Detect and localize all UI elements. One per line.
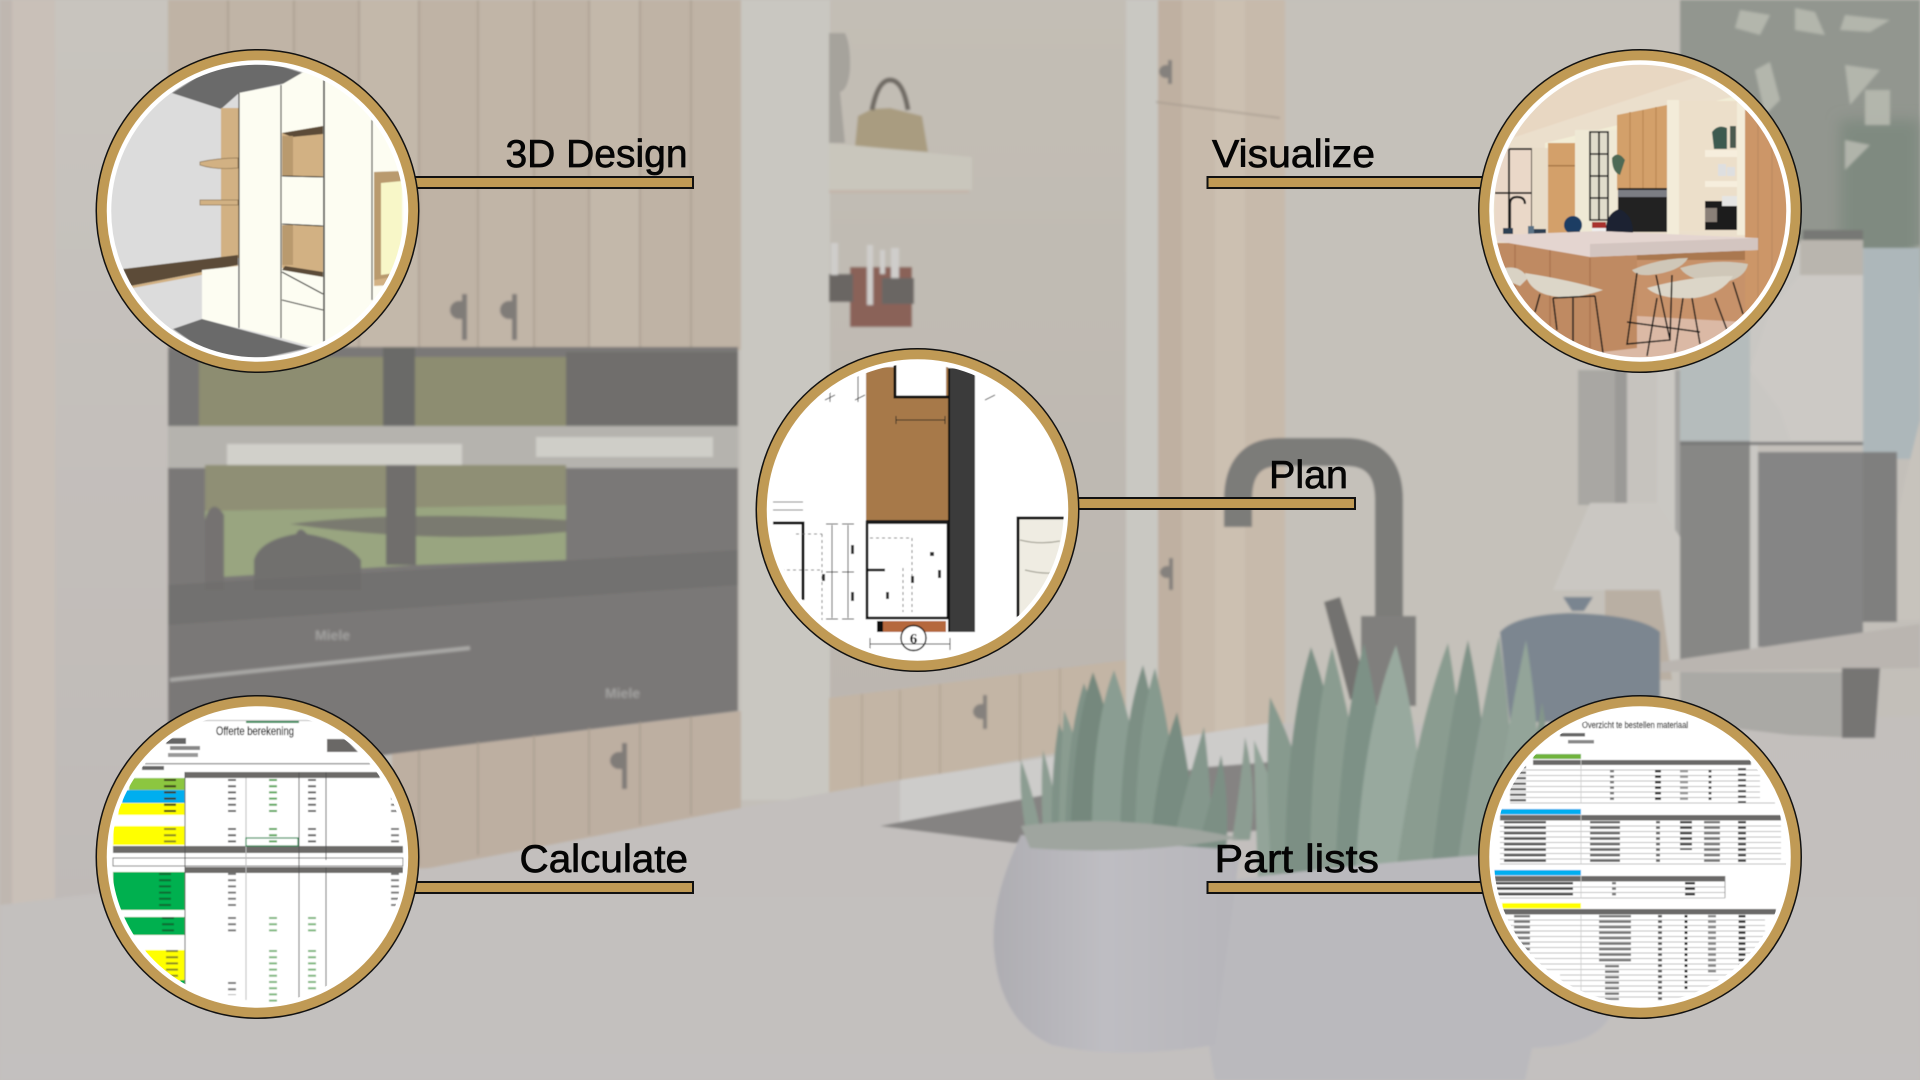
background: blurred kitchen photo: Miele [315,627,350,643]
connector: Visualize [1208,177,1488,188]
panel: 3D design circle [96,50,420,372]
ring [756,349,1078,671]
lower wooden cabinets [392,711,741,880]
panel: plan circle [756,349,1078,671]
countertop [0,716,1920,1080]
connector: Part lists [1208,882,1488,893]
faucet [1238,452,1389,650]
image: materials spreadsheet: Overzicht te bestellen materiaal [1582,720,1688,731]
ring [96,696,418,1018]
background: blurred kitchen photo: Miele [605,685,640,701]
image: floor plan drawing: 6 [910,632,918,648]
connector: Plan [1074,498,1355,509]
image: kitchen render [1494,64,1786,358]
oven and reflections [168,347,738,790]
heading: Plan: Plan [1269,454,1348,497]
plants [1020,636,1549,880]
image: 3D cabinet model [110,60,420,359]
panel: part lists circle [1479,696,1801,1018]
ring [96,50,418,372]
ring [1479,50,1801,372]
pots [1199,850,1615,1080]
heading: 3D Design: 3D Design [506,133,688,176]
image: floor plan drawing [770,360,1070,658]
panel: calculate circle [96,696,418,1018]
heading: Part lists: Part lists [1214,838,1379,881]
connector: 3D Design [412,177,693,188]
heading: Visualize: Visualize [1212,133,1375,176]
ring [1479,696,1801,1018]
panel: visualize circle [1479,50,1801,372]
image: quotation spreadsheet: Offerte berekening [216,724,294,738]
image: materials spreadsheet [1492,709,1790,1005]
heading: Calculate: Calculate [520,838,688,881]
connector: Calculate [412,882,693,893]
image: quotation spreadsheet [110,709,406,1005]
right side: greenery, panels, lamp, table [1680,0,1920,245]
